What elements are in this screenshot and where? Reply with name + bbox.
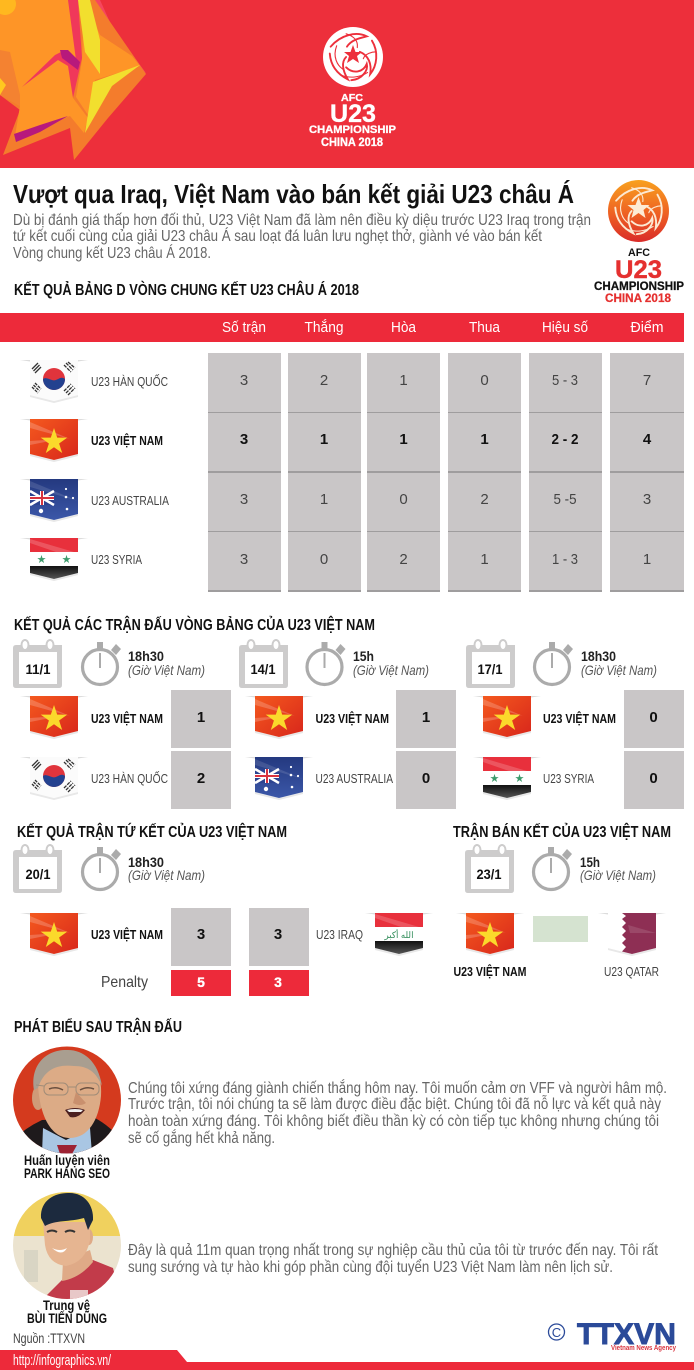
match time: (Giờ Việt Nam) (128, 662, 205, 678)
team: Vietnam score: U23 VIỆT NAM (91, 711, 163, 726)
table header: Hòa (391, 319, 417, 336)
heading: quarter final: KẾT QUẢ TRẬN TỨ KẾT CỦA U23 VIỆT NAM (17, 822, 287, 841)
row: Korea: 0 (480, 372, 489, 389)
team: Qatar (598, 913, 666, 979)
row: Syria: 3 (240, 551, 248, 568)
icon: ball colour (608, 180, 669, 242)
team: Australia score (245, 751, 456, 809)
icon: calendar: 11/1 (26, 661, 51, 677)
logo: AFC U23 colour: CHINA 2018 (605, 293, 672, 305)
logo: AFC U23 white: CHINA 2018 (321, 137, 384, 149)
team: Syria score: 0 (649, 770, 658, 787)
team: Korea score (20, 751, 231, 809)
row: Korea: 1 (399, 372, 408, 389)
row: Vietnam: 4 (643, 431, 652, 448)
row: Syria: 0 (320, 551, 328, 568)
team: Vietnam: U23 VIỆT NAM (454, 964, 526, 979)
panel: semi final match (454, 844, 666, 979)
match time: 18h30 (128, 648, 164, 664)
table columns (208, 353, 684, 592)
row: Vietnam: U23 VIỆT NAM (91, 433, 163, 448)
row: Korea: U23 HÀN QUỐC (91, 374, 168, 389)
icon: stopwatch (307, 642, 346, 684)
team: Iraq (316, 913, 433, 956)
logo: TTXVN: Vietnam News Agency (611, 1343, 677, 1352)
row: Syria: 1 - 3 (552, 551, 578, 568)
row: Korea: 5 - 3 (552, 372, 578, 389)
team: Korea score: 2 (197, 770, 205, 787)
row: Syria (20, 538, 651, 581)
table header: Hiệu số (542, 319, 589, 336)
row: Syria: 1 (480, 551, 489, 568)
source: Nguồn :TTXVN (13, 1330, 85, 1346)
team: Syria score (473, 751, 684, 809)
row: Vietnam: 2 - 2 (552, 431, 578, 448)
row: Syria: U23 SYRIA (91, 552, 142, 567)
match time (128, 854, 205, 883)
photo: Park Hang Seo (13, 1046, 121, 1154)
icon: calendar (466, 639, 515, 688)
match time (128, 648, 205, 678)
panel: player statement (13, 1192, 658, 1326)
row: Vietnam: 3 (240, 431, 248, 448)
match time: 15h (353, 648, 374, 664)
row: Korea: 2 (320, 372, 328, 389)
intro paragraph: Vòng chung kết U23 châu Á 2018. (13, 243, 211, 262)
panel: match 14/1 (239, 639, 456, 809)
row: Australia: 1 (320, 491, 328, 508)
icon: calendar (13, 844, 62, 893)
match time: 18h30 (128, 854, 164, 870)
team: Qatar: U23 QATAR (604, 964, 659, 979)
caption: player: BÙI TIẾN DŨNG (27, 1309, 107, 1326)
caption: coach: PARK HANG SEO (24, 1165, 110, 1181)
icon: calendar (13, 639, 62, 688)
caption: coach: Huấn luyện viên (24, 1152, 110, 1168)
row: Australia: 2 (480, 491, 489, 508)
intro paragraph (13, 212, 591, 262)
table header: Số trận (222, 319, 266, 336)
logo: AFC U23 white: AFC (341, 93, 363, 104)
match time: 18h30 (581, 648, 616, 664)
score boxes (171, 908, 309, 966)
team: Vietnam score: 1 (422, 709, 430, 726)
logo: TTXVN: TTXVN (577, 1318, 676, 1351)
row: Australia: U23 AUSTRALIA (91, 493, 169, 508)
panel: quarter final match (13, 844, 433, 996)
table header: Điểm (630, 319, 664, 336)
row: Australia (20, 479, 651, 522)
team: Vietnam score (245, 690, 456, 748)
team: Australia score: U23 AUSTRALIA (316, 771, 393, 786)
panel: match 17/1 (466, 639, 684, 809)
match time (353, 648, 429, 678)
team: Vietnam (20, 913, 163, 956)
icon: calendar (239, 639, 288, 688)
row: Korea: 3 (240, 372, 248, 389)
icon: calendar (465, 844, 514, 893)
penalty row: 3 (274, 974, 282, 990)
panel: header banner (0, 0, 694, 168)
row: Vietnam: 1 (399, 431, 408, 448)
row: Syria: 2 (399, 551, 408, 568)
team: Iraq: U23 IRAQ (316, 927, 363, 942)
logo: AFC U23 white (309, 27, 396, 149)
photo: Bui Tien Dung (13, 1192, 121, 1300)
team: Australia score: 0 (422, 770, 430, 787)
table header: Thắng (304, 319, 344, 336)
team: Vietnam score: U23 VIỆT NAM (316, 711, 389, 726)
team: Vietnam (454, 913, 526, 979)
icon: stopwatch (82, 642, 121, 684)
row: Korea (20, 360, 651, 403)
copyright mark: C (552, 1325, 561, 1340)
caption: coach (24, 1152, 110, 1181)
penalty row (101, 970, 309, 996)
logo: AFC U23 colour: AFC (628, 247, 650, 259)
row: Vietnam: 1 (480, 431, 489, 448)
match time (581, 648, 657, 678)
quote: coach: sẽ cố gắng hết khả năng. (128, 1128, 275, 1147)
title: Vượt qua Iraq, Việt Nam vào bán kết giải U23 châu Á (13, 179, 574, 209)
match time: (Giờ Việt Nam) (353, 662, 429, 678)
match time: 15h (580, 854, 600, 870)
row: Australia: 3 (240, 491, 248, 508)
match time: (Giờ Việt Nam) (580, 867, 656, 883)
team: Vietnam score: 0 (649, 709, 658, 726)
icon: stopwatch (534, 847, 572, 890)
row: Vietnam: 1 (320, 431, 328, 448)
score boxes: 3 (274, 926, 282, 943)
icon: calendar: 14/1 (250, 661, 276, 677)
heading: group D results: KẾT QUẢ BẢNG D VÒNG CHUNG KẾT U23 CHÂU Á 2018 (14, 280, 359, 299)
logo: AFC U23 colour (594, 180, 684, 305)
row: Vietnam (20, 419, 652, 462)
icon: ball (323, 27, 383, 87)
match time: (Giờ Việt Nam) (581, 662, 657, 678)
caption: player: Trung vệ (43, 1297, 90, 1313)
footer bar: http://infographics.vn/ (13, 1352, 112, 1369)
logo: AFC U23 white: CHAMPIONSHIP (309, 124, 396, 136)
team: Vietnam score (20, 690, 231, 748)
row: Syria: 1 (643, 551, 651, 568)
logo: AFC U23 white: U23 (330, 100, 376, 128)
team: Vietnam: U23 VIỆT NAM (91, 927, 163, 942)
team: Vietnam score (473, 690, 684, 748)
intro paragraph: tứ kết cuối cùng của giải U23 châu Á sau loạt đá luân lưu nghẹt thở, giành vé vào bán kết (13, 226, 542, 245)
match time (580, 854, 656, 883)
row: Australia: 5 -5 (554, 491, 576, 508)
icon: calendar: 23/1 (476, 866, 502, 882)
heading: group stage matches: KẾT QUẢ CÁC TRẬN ĐẤU VÒNG BẢNG CỦA U23 VIỆT NAM (14, 615, 375, 634)
caption: player (27, 1297, 107, 1326)
row: Australia: 3 (643, 491, 651, 508)
panel: match 11/1 (13, 639, 231, 809)
heading: post-match statements: PHÁT BIỂU SAU TRẬN ĐẤU (14, 1017, 182, 1036)
team: Vietnam score: 1 (197, 709, 205, 726)
icon: stopwatch (534, 642, 573, 684)
score placeholder (533, 916, 588, 942)
intro paragraph: Dù bị đánh giá thấp hơn đối thủ, U23 Việt Nam đã làm nên điều kỳ diệu trước U23 Iraq trong trận (13, 212, 591, 229)
logo: AFC U23 colour: CHAMPIONSHIP (594, 281, 684, 293)
panel: standings table (0, 313, 684, 592)
icon: stopwatch (82, 847, 121, 890)
score boxes: 3 (197, 926, 205, 943)
team: Syria score: U23 SYRIA (543, 771, 594, 786)
table header (0, 313, 684, 342)
team: Korea score: U23 HÀN QUỐC (91, 771, 168, 786)
penalty row: 5 (197, 974, 205, 990)
row: Korea: 7 (643, 372, 651, 389)
starburst decoration (0, 0, 146, 160)
quote: coach (128, 1078, 667, 1147)
panel: coach statement (13, 1046, 667, 1181)
table header: Thua (469, 319, 501, 336)
penalty row: Penalty (101, 974, 148, 991)
team: Vietnam score: U23 VIỆT NAM (543, 711, 616, 726)
quote: player (128, 1242, 658, 1276)
match time: (Giờ Việt Nam) (128, 867, 205, 883)
footer bar (0, 1350, 694, 1370)
logo: AFC U23 colour: U23 (615, 256, 662, 284)
row: Australia: 0 (399, 491, 408, 508)
icon: calendar: 17/1 (478, 661, 503, 677)
icon: calendar: 20/1 (26, 866, 51, 882)
